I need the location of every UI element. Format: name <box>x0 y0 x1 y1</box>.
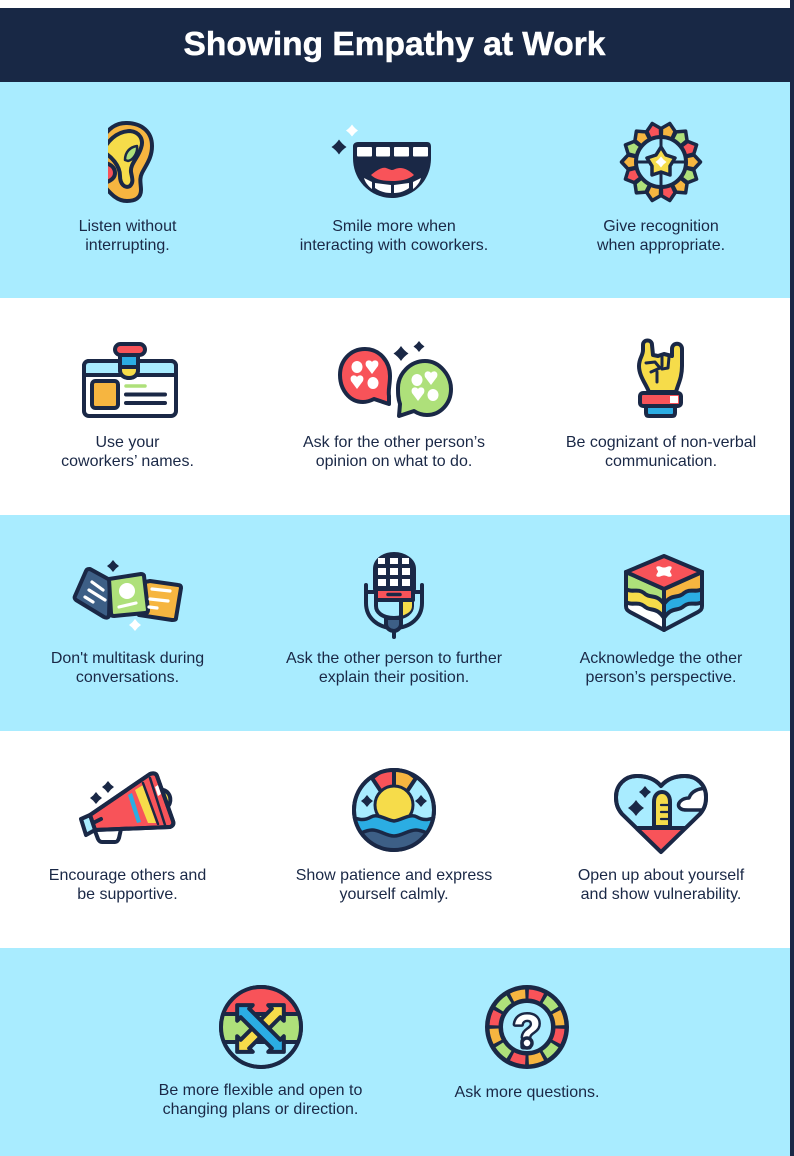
text: names: coworkers’ names. <box>61 453 194 470</box>
text: recognition: when appropriate. <box>597 237 725 254</box>
text: multitask: Don't multitask during <box>51 650 204 667</box>
text: non-verbal: Be cognizant of non-verbal <box>566 434 756 451</box>
text: multitask: conversations. <box>76 669 179 686</box>
text: encourage <box>49 867 206 903</box>
text: perspective: Acknowledge the other <box>580 650 742 667</box>
text: explain <box>286 650 502 686</box>
icon: heart with keyhole <box>615 776 710 858</box>
text: opinion: Ask for the other person’s <box>303 434 485 451</box>
text: smile: Smile more when <box>332 218 456 235</box>
icon: flexible arrows <box>219 985 303 1069</box>
text: encourage: Encourage others and <box>49 867 206 884</box>
panel: row 1 background <box>0 82 790 298</box>
icon: multitask documents <box>75 560 181 631</box>
title banner: Showing Empathy at Work <box>184 26 605 63</box>
text: patience: Show patience and express <box>296 867 492 884</box>
text: perspective: person’s perspective. <box>586 669 736 686</box>
icon: recognition flower <box>622 122 700 202</box>
text: vulnerability: and show vulnerability. <box>581 886 741 903</box>
text: questions: Ask more questions. <box>455 1084 599 1101</box>
right edge strip <box>790 0 794 1156</box>
icon: question ring <box>487 987 567 1067</box>
text: names <box>61 434 194 470</box>
text: patience <box>296 867 492 903</box>
text: vulnerability <box>578 867 744 903</box>
icon: ear <box>100 123 152 201</box>
panel: row 3 background <box>0 515 790 731</box>
text: flexible: Be more flexible and open to <box>159 1082 362 1099</box>
icon: layered cube <box>626 556 702 630</box>
text: explain: Ask the other person to further <box>286 650 502 667</box>
text: listen <box>79 218 176 254</box>
text: listen: Listen without <box>79 218 176 235</box>
text: flexible <box>159 1082 362 1118</box>
text: opinion <box>303 434 485 470</box>
text: recognition: Give recognition <box>603 218 719 235</box>
panel: row 5 background <box>0 948 790 1156</box>
text: patience: yourself calmly. <box>339 886 449 903</box>
text: vulnerability: Open up about yourself <box>578 867 744 884</box>
icon: sunrise over water <box>352 768 436 852</box>
text: recognition <box>597 218 725 254</box>
text: non-verbal <box>566 434 756 470</box>
icon: hand gesture <box>639 340 682 416</box>
text: smile <box>300 218 488 254</box>
text: perspective <box>580 650 742 686</box>
text: encourage: be supportive. <box>77 886 178 903</box>
text: flexible: changing plans or direction. <box>163 1101 358 1118</box>
text: names: Use your <box>95 434 160 451</box>
icon: microphone <box>366 554 422 637</box>
title banner <box>0 8 790 82</box>
icon: question ring: ? <box>513 1005 541 1057</box>
text: non-verbal: communication. <box>605 453 717 470</box>
text: multitask <box>51 650 204 686</box>
text: listen: interrupting. <box>85 237 170 254</box>
icon: speech bubbles with hearts <box>340 341 451 416</box>
icon: megaphone <box>81 773 173 842</box>
text: smile: interacting with coworkers. <box>300 237 488 254</box>
text: explain: explain their position. <box>319 669 469 686</box>
text: opinion: opinion on what to do. <box>316 453 472 470</box>
icon: ID badge <box>84 344 176 416</box>
icon: smiling mouth <box>332 124 431 198</box>
